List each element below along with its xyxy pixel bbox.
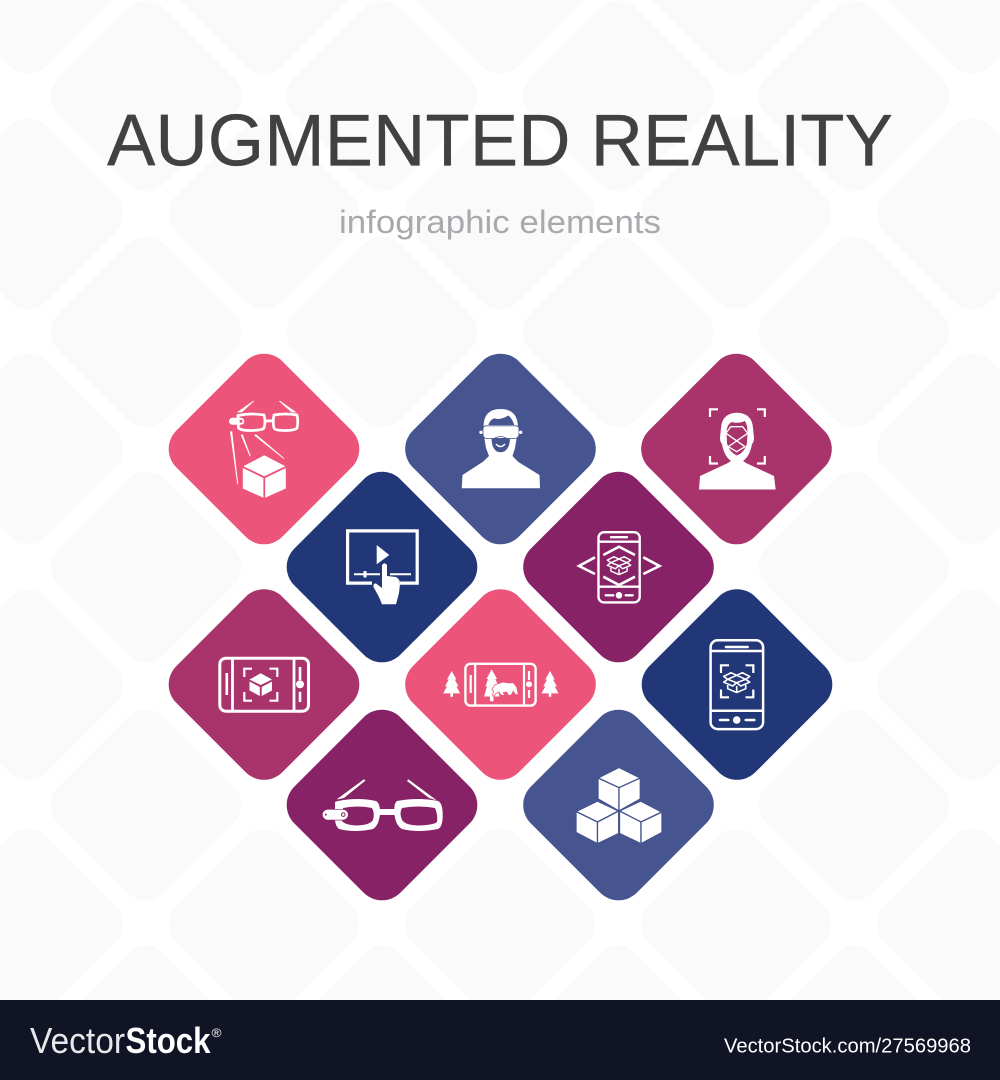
footer logo <box>30 1020 222 1061</box>
panel: interactive video screen <box>276 461 488 673</box>
footer image id: VectorStock.com/27569968 <box>724 1034 971 1058</box>
icon: face scan person <box>699 409 776 490</box>
icon: three stacked cubes <box>576 767 662 844</box>
icon: phone with box and chevrons <box>579 532 660 602</box>
icon: portrait phone with box in frame <box>710 640 763 729</box>
icon: person wearing VR headset <box>462 409 540 488</box>
icon: video screen with tapping hand <box>348 531 417 604</box>
icon: glasses with projected cube <box>229 401 298 498</box>
panel: AR phone with bear and trees <box>394 578 607 791</box>
panel: smart glasses <box>276 699 488 911</box>
footer bar <box>0 1000 1000 1080</box>
footer logo: Stock <box>126 1020 211 1061</box>
icon: landscape phone with bear between trees <box>443 663 558 706</box>
panel: face recognition <box>630 343 843 555</box>
icon: landscape phone scanning cube <box>220 658 308 711</box>
footer logo: ® <box>212 1026 222 1040</box>
icon: smart glasses with side camera <box>322 779 443 831</box>
panel: stacked cubes <box>512 699 725 911</box>
panel: AR phone with box <box>512 461 725 673</box>
panel: VR headset user <box>394 343 607 555</box>
subtitle: infographic elements <box>339 204 661 240</box>
footer logo: Vector <box>30 1020 125 1061</box>
panel: phone scanning box <box>631 578 843 791</box>
panel: landscape phone with cube <box>158 578 370 791</box>
panel: smart glasses projecting cube <box>158 343 370 555</box>
title: AUGMENTED REALITY <box>107 100 893 182</box>
